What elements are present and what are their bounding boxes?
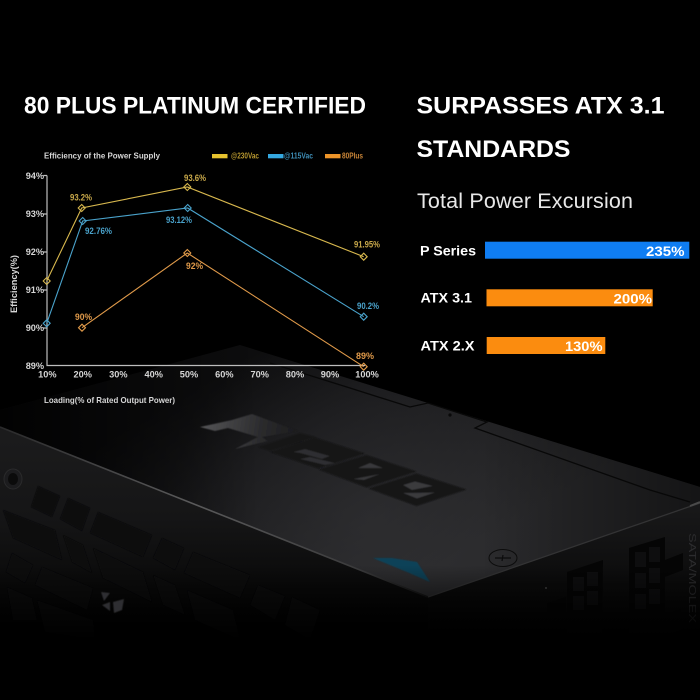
x axis labels: 90% xyxy=(321,370,339,380)
x axis labels: 100% xyxy=(355,370,379,380)
connector socket B xyxy=(629,537,683,650)
bar: ATX 2.X: 130% xyxy=(565,339,602,354)
x axis labels: 70% xyxy=(251,370,269,380)
vertical SATA label: SATA/MOLEX xyxy=(686,533,697,623)
y axis labels: 90% xyxy=(26,323,44,333)
data labels: 93.2% xyxy=(70,192,92,202)
connector socket A xyxy=(547,560,603,650)
bar: P Series xyxy=(420,242,689,259)
heading: surpasses ATX 3.1 standards: STANDARDS xyxy=(416,136,570,163)
series: 230Vac xyxy=(43,184,367,284)
series: 80Plus xyxy=(78,250,367,370)
x axis title: Loading(% of Rated Output Power) xyxy=(44,395,175,405)
x axis labels: 30% xyxy=(109,370,127,380)
axes xyxy=(44,176,365,366)
y axis labels xyxy=(26,171,44,371)
bar: ATX 3.1: ATX 3.1 xyxy=(420,291,473,306)
chart title: Efficiency of the Power Supply xyxy=(44,150,160,160)
y axis labels: 91% xyxy=(26,285,44,295)
heading: 80 plus platinum: 80 PLUS PLATINUM CERTIFIED xyxy=(24,92,366,120)
data labels: 92% xyxy=(186,261,203,271)
data labels: 90% xyxy=(75,312,92,322)
mounting screw hole xyxy=(4,469,22,489)
heading: surpasses ATX 3.1 standards: SURPASSES ATX 3.1 xyxy=(416,92,664,120)
legend: @115Vac xyxy=(284,150,313,160)
P1200 logo xyxy=(200,414,466,506)
PSU left side panel with vents xyxy=(0,427,428,700)
data labels: 92.76% xyxy=(85,226,112,236)
power supply unit photo xyxy=(0,345,700,700)
y axis labels: 92% xyxy=(26,247,44,257)
data labels: 91.95% xyxy=(354,240,380,250)
PSU top face xyxy=(0,345,700,597)
legend xyxy=(212,150,363,160)
y axis labels: 94% xyxy=(26,171,44,181)
legend: @230Vac xyxy=(231,150,259,160)
bar: P Series: 235% xyxy=(646,244,684,259)
data labels xyxy=(70,173,380,361)
data labels: 93.12% xyxy=(166,215,192,225)
series: 115Vac xyxy=(43,204,367,327)
y axis title: Efficiency(%) xyxy=(9,255,19,313)
vent highlights xyxy=(101,592,124,613)
heading: surpasses ATX 3.1 standards xyxy=(416,92,664,163)
bar: ATX 3.1 xyxy=(420,289,653,306)
x axis labels: 10% xyxy=(38,370,56,380)
bar: P Series: P Series xyxy=(420,244,476,258)
bar chart title: Total Power Excursion xyxy=(417,189,633,213)
bar chart: total power excursion xyxy=(417,189,689,354)
PSU right side panel with connectors xyxy=(428,503,700,700)
ventilation grille xyxy=(3,486,320,640)
bottom fade to black xyxy=(0,565,700,700)
y axis labels: 89% xyxy=(26,361,44,371)
x axis labels xyxy=(38,370,379,380)
y axis labels: 93% xyxy=(26,209,44,219)
x axis labels: 50% xyxy=(180,370,198,380)
data labels: 89% xyxy=(356,351,374,361)
PSU highlighted edges xyxy=(0,427,700,597)
small side marker xyxy=(545,587,547,589)
x axis labels: 80% xyxy=(286,370,304,380)
screw on top face xyxy=(489,550,517,566)
data labels: 90.2% xyxy=(357,301,379,311)
blue light mark xyxy=(373,558,430,582)
x axis labels: 40% xyxy=(145,370,163,380)
data labels: 93.6% xyxy=(184,173,206,183)
bar: ATX 2.X: ATX 2.X xyxy=(420,338,474,353)
bar: ATX 2.X xyxy=(420,337,605,354)
legend: 80Plus xyxy=(342,150,363,160)
x axis labels: 60% xyxy=(215,370,233,380)
x axis labels: 20% xyxy=(74,370,92,380)
efficiency line chart xyxy=(9,150,380,405)
bar: ATX 3.1: 200% xyxy=(614,291,652,306)
